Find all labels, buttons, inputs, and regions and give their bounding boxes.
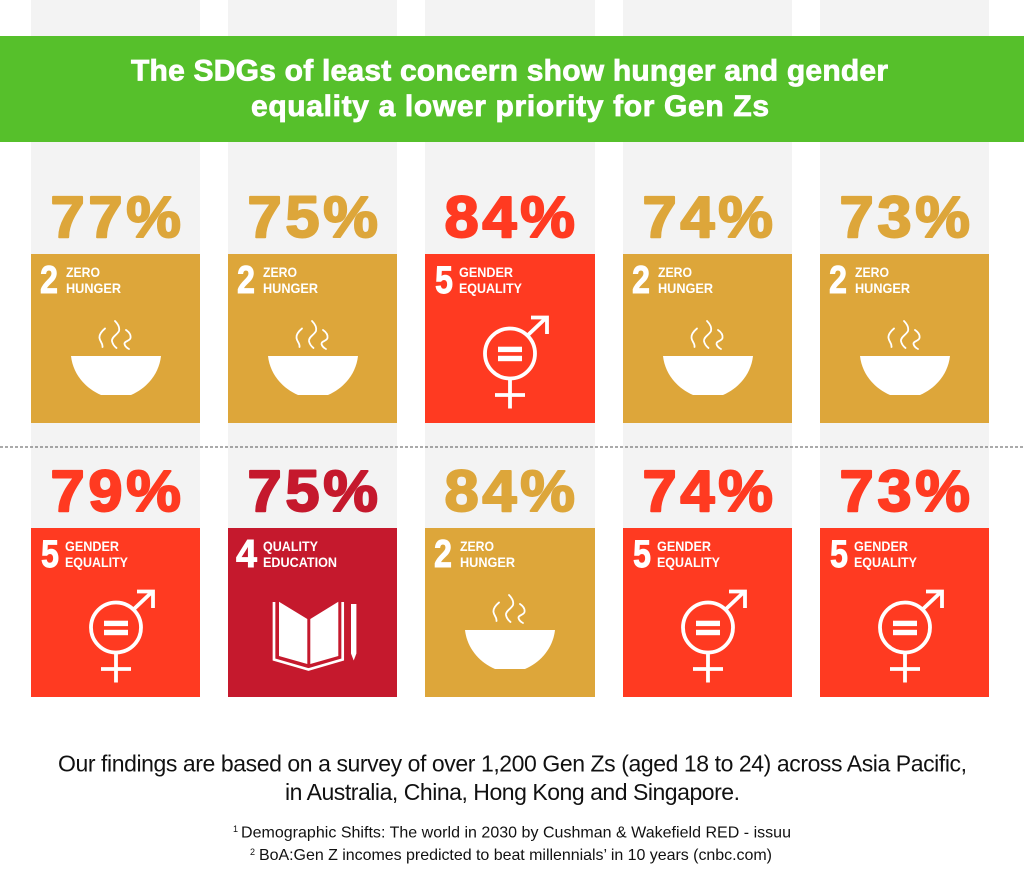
title banner: The SDGs of least concern show hunger and gender [131, 54, 888, 88]
panel: row 1 column 1, 77% zero hunger: ZERO [66, 264, 100, 280]
panel: row 1 column 5, 73% zero hunger: 2 [829, 259, 847, 302]
panel: row 2 column 2, 75% quality education [228, 459, 397, 697]
panel: row 1 column 2, 75% zero hunger: HUNGER [263, 280, 318, 296]
panel: row 2 column 4, 74% gender equality: GENDER [657, 538, 711, 554]
survey description text: Our findings are based on a survey of over 1,200 Gen Zs (aged 18 to 24) across Asia Pacific, [58, 750, 967, 776]
panel: row 2 column 3, 84% zero hunger: ZERO [460, 538, 494, 554]
panel: row 2 column 1, 79% gender equality: 79% [50, 459, 185, 524]
footnotes: 1 [233, 824, 238, 834]
panel: row 1 column 1, 77% zero hunger: 77% [50, 185, 185, 250]
panel: row 1 column 4, 74% zero hunger: HUNGER [658, 280, 713, 296]
panel: row 2 column 5, 73% gender equality: 5 [830, 533, 848, 576]
panel: row 1 column 5, 73% zero hunger [820, 185, 989, 423]
panel: row 1 column 5, 73% zero hunger: HUNGER [855, 280, 910, 296]
panel: row 2 column 4, 74% gender equality: 5 [633, 533, 651, 576]
panel: row 2 column 2, 75% quality education: 4 [236, 533, 257, 576]
panel: row 1 column 5, 73% zero hunger: 73% [840, 185, 974, 250]
panel: row 1 column 3, 84% gender equality [425, 185, 595, 423]
panel: row 2 column 2, 75% quality education: QUALITY [263, 538, 319, 554]
panel: row 1 column 5, 73% zero hunger: ZERO [855, 264, 889, 280]
panel: row 2 column 3, 84% zero hunger [425, 459, 595, 697]
survey description text: in Australia, China, Hong Kong and Singapore. [285, 779, 740, 805]
panel: row 2 column 4, 74% gender equality: 74% [642, 459, 777, 524]
panel: row 1 column 4, 74% zero hunger: 74% [642, 185, 777, 250]
footnotes [233, 824, 791, 864]
panel: row 1 column 1, 77% zero hunger: HUNGER [66, 280, 121, 296]
footnotes: BoA:Gen Z incomes predicted to beat millennials’ in 10 years (cnbc.com) [259, 847, 772, 864]
panel: row 1 column 1, 77% zero hunger [31, 185, 200, 423]
panel: row 1 column 2, 75% zero hunger: 75% [248, 185, 382, 250]
panel: row 2 column 1, 79% gender equality: 5 [41, 533, 59, 576]
panel: row 1 column 3, 84% gender equality: 5 [435, 259, 453, 302]
panel: row 1 column 3, 84% gender equality: EQUALITY [459, 280, 523, 296]
panel: row 2 column 3, 84% zero hunger: 84% [444, 459, 579, 524]
panel: row 1 column 3, 84% gender equality: 84% [444, 185, 579, 250]
footnotes: Demographic Shifts: The world in 2030 by Cushman & Wakefield RED - issuu [241, 824, 791, 842]
panel: row 2 column 3, 84% zero hunger: HUNGER [460, 554, 515, 570]
panel: row 2 column 5, 73% gender equality: GENDER [854, 538, 908, 554]
panel: row 1 column 2, 75% zero hunger: 2 [237, 259, 255, 302]
panel: row 2 column 1, 79% gender equality [31, 459, 200, 697]
panel: row 2 column 5, 73% gender equality: EQUALITY [854, 554, 918, 570]
panel: row 2 column 4, 74% gender equality: EQUALITY [657, 554, 721, 570]
panel: row 1 column 4, 74% zero hunger: ZERO [658, 264, 692, 280]
survey description text [58, 750, 967, 805]
panel: row 1 column 1, 77% zero hunger: 2 [40, 259, 58, 302]
panel: row 1 column 2, 75% zero hunger: ZERO [263, 264, 297, 280]
title banner: equality a lower priority for Gen Zs [251, 90, 769, 123]
panel: row 2 column 5, 73% gender equality [820, 459, 989, 697]
panel: row 2 column 5, 73% gender equality: 73% [840, 459, 974, 524]
footnotes: 2 [250, 847, 255, 857]
panel: row 1 column 4, 74% zero hunger: 2 [632, 259, 650, 302]
title banner [0, 36, 1024, 142]
panel: row 2 column 3, 84% zero hunger: 2 [434, 533, 452, 576]
panel: row 2 column 2, 75% quality education: 75% [248, 459, 382, 524]
panel: row 2 column 1, 79% gender equality: GENDER [65, 538, 119, 554]
panel: row 1 column 3, 84% gender equality: GENDER [459, 264, 513, 280]
panel: row 2 column 4, 74% gender equality [623, 459, 792, 697]
panel: row 2 column 1, 79% gender equality: EQUALITY [65, 554, 129, 570]
panel: row 1 column 2, 75% zero hunger [228, 185, 397, 423]
panel: row 2 column 2, 75% quality education: EDUCATION [263, 554, 337, 570]
panel: row 1 column 4, 74% zero hunger [623, 185, 792, 423]
